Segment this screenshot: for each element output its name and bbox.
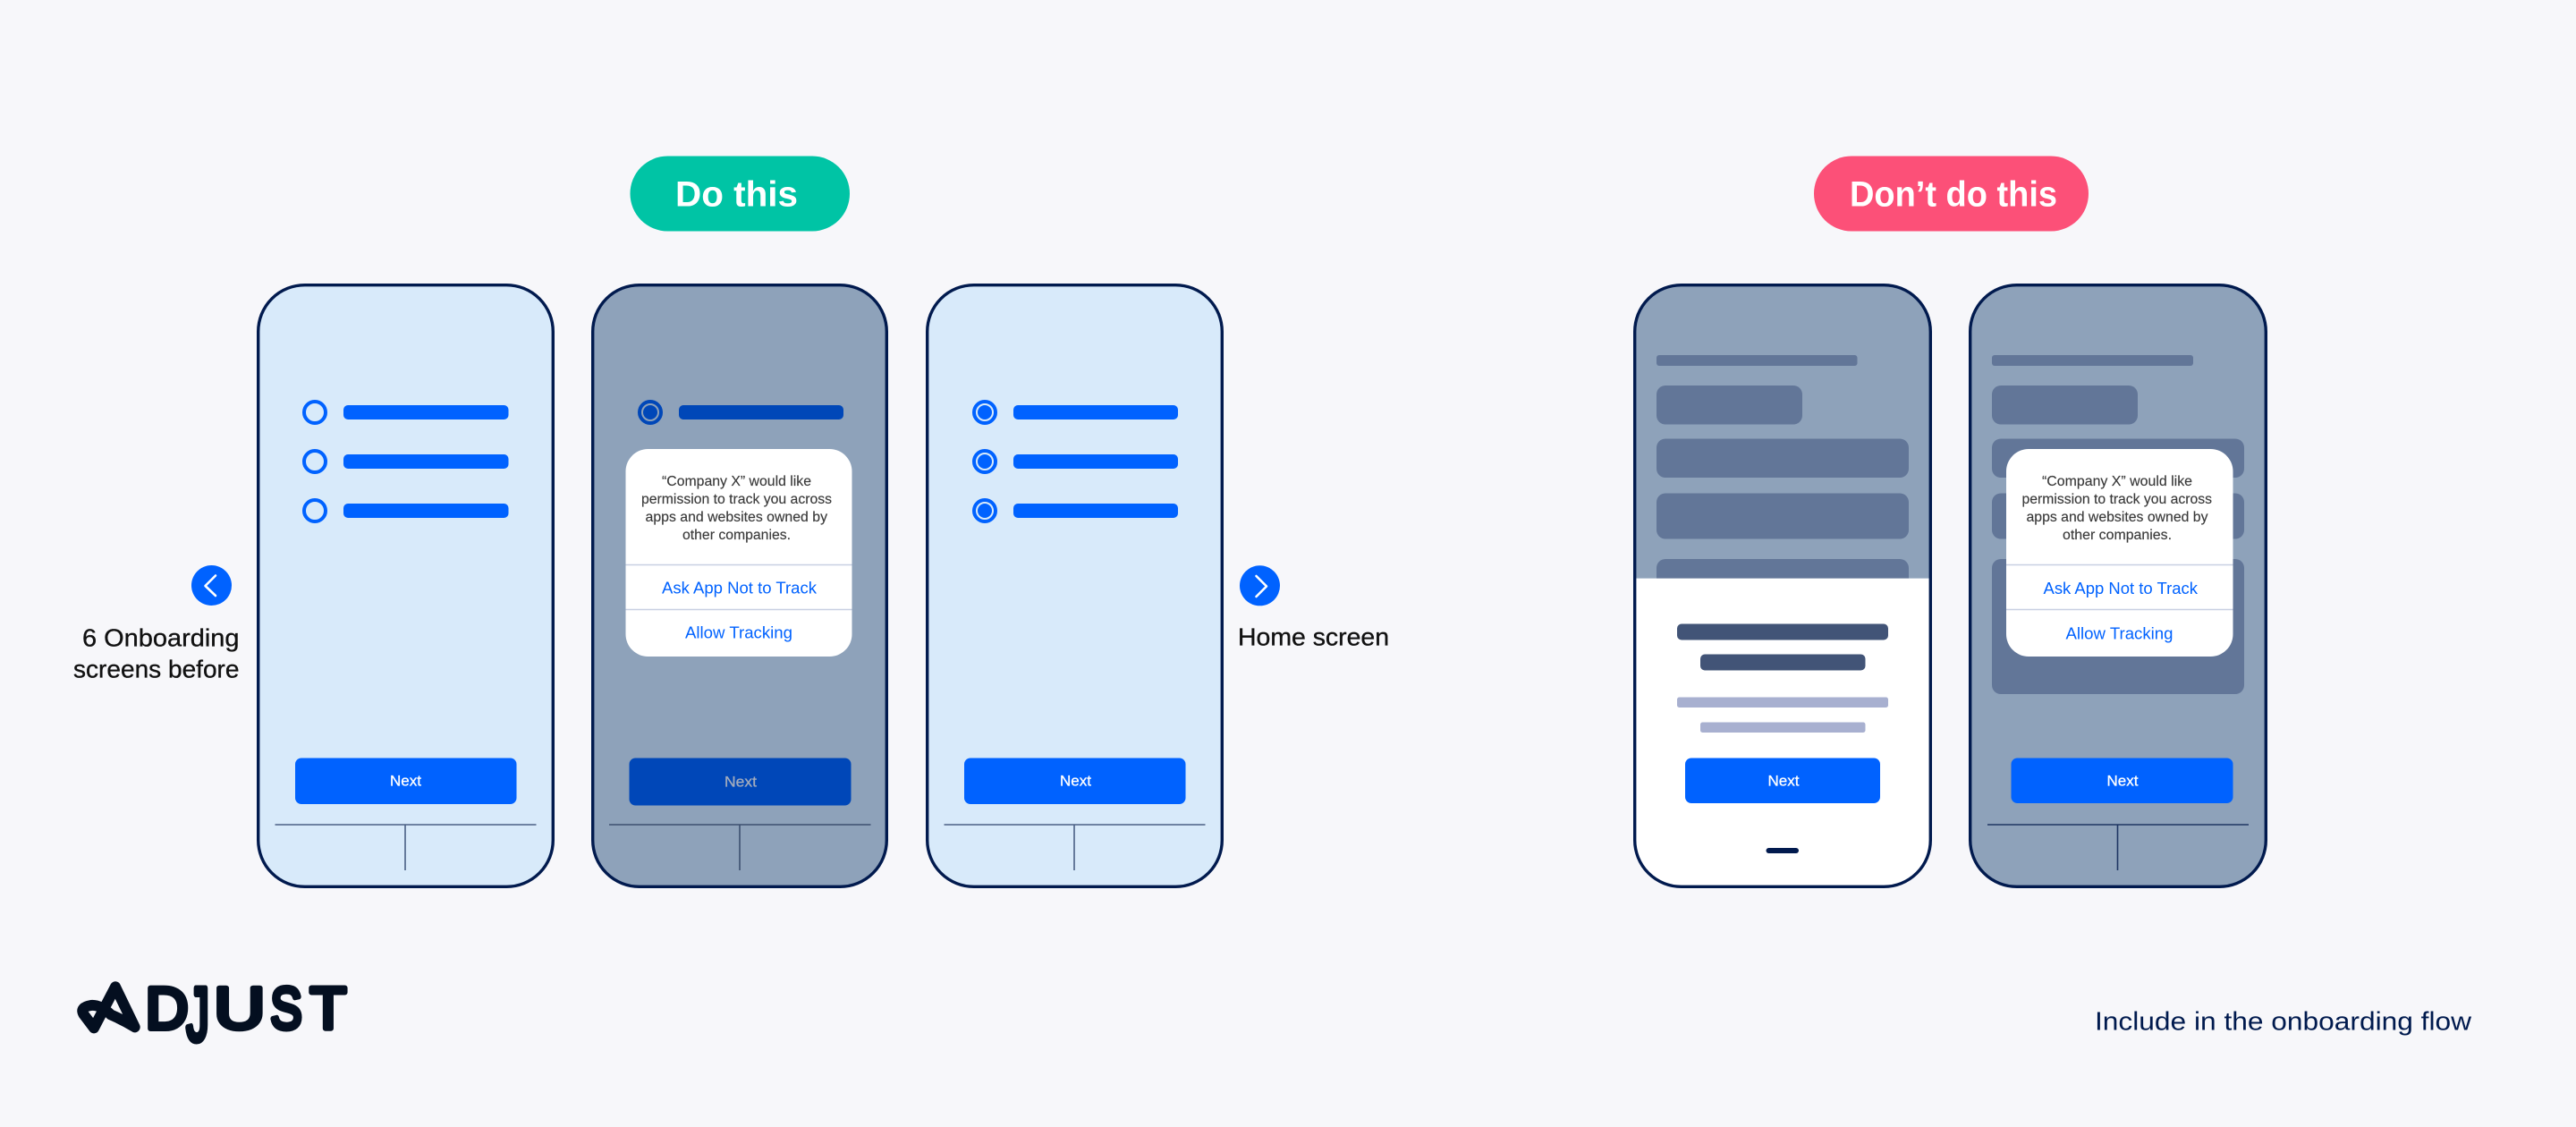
tracking permission dialog: permission to track you across [641, 492, 832, 507]
heading pill: Don't do this: Don’t do this [1850, 175, 2057, 215]
label: 6 onboarding screens before: screens before [73, 655, 240, 683]
tab bar [609, 825, 871, 870]
phone: onboarding screen after prompt [928, 285, 1222, 886]
next button [1685, 758, 1880, 803]
label: 6 onboarding screens before [73, 624, 240, 683]
tracking permission dialog: “Company X” would like [2042, 474, 2192, 489]
next button: Next [2107, 773, 2139, 789]
home indicator [1766, 848, 1799, 853]
tracking permission dialog: apps and websites owned by [646, 510, 827, 525]
tab bar [945, 825, 1206, 870]
next button: Next [1060, 773, 1091, 789]
heading pill: Do this: Do this [675, 175, 798, 215]
logo wordmark [146, 972, 346, 1056]
tracking permission dialog: other companies. [682, 528, 791, 543]
tab bar [1987, 825, 2249, 870]
next button [2011, 758, 2233, 803]
selected option, dimmed [640, 402, 843, 423]
next button [295, 758, 517, 804]
sheet body bars [1677, 698, 1888, 733]
tracking permission dialog: Ask App Not to Track [2043, 580, 2199, 597]
next button: Next [390, 773, 421, 789]
next button [964, 758, 1186, 804]
phone: tracking prompt over onboarding screen [593, 285, 886, 886]
tracking permission dialog: permission to track you across [2021, 492, 2212, 507]
phone: tracking prompt over unrelated content [1970, 285, 2266, 886]
icon: back chevron button [191, 565, 232, 606]
logo wordmark: S [270, 975, 302, 1041]
logo wordmark: J [186, 972, 209, 1056]
label: 6 onboarding screens before: 6 Onboarding [82, 624, 240, 651]
logo: Adjust [82, 972, 346, 1056]
option list, unselected [304, 402, 508, 521]
tracking permission dialog: apps and websites owned by [2027, 510, 2207, 525]
logo mark: looped A [82, 987, 135, 1028]
logo wordmark: D [146, 975, 188, 1041]
bottom sheet [1635, 579, 1930, 886]
phone: custom pre-prompt sheet over content [1635, 285, 1930, 886]
logo wordmark: T [310, 975, 346, 1041]
heading pill: Do this [630, 156, 850, 231]
next button, disabled [630, 758, 852, 805]
tracking permission dialog [626, 449, 852, 657]
tracking permission dialog: “Company X” would like [662, 474, 811, 489]
next button, disabled: Next [724, 773, 757, 791]
next button: Next [1767, 773, 1800, 789]
option list, selected [974, 402, 1178, 521]
previous screens arrow and label [73, 565, 240, 683]
blurred background content [1992, 355, 2244, 694]
tracking permission dialog: Ask App Not to Track [662, 580, 818, 597]
tracking permission dialog: Allow Tracking [685, 624, 792, 642]
tracking permission dialog [2006, 449, 2233, 657]
caption: include in the onboarding flow: Include in the onboarding flow [2095, 1007, 2472, 1036]
heading pill: Don't do this [1814, 156, 2089, 231]
label: home screen: Home screen [1238, 623, 1389, 651]
tracking permission dialog: Allow Tracking [2066, 624, 2174, 642]
sheet title bars [1677, 624, 1888, 671]
next screen arrow and label [1238, 565, 1389, 651]
tab bar [275, 825, 537, 870]
tracking permission dialog: other companies. [2063, 528, 2172, 543]
logo wordmark: U [214, 976, 265, 1041]
blurred background content [1657, 355, 1909, 579]
icon: forward chevron button [1240, 565, 1280, 606]
phone: onboarding screen before prompt [258, 285, 553, 886]
